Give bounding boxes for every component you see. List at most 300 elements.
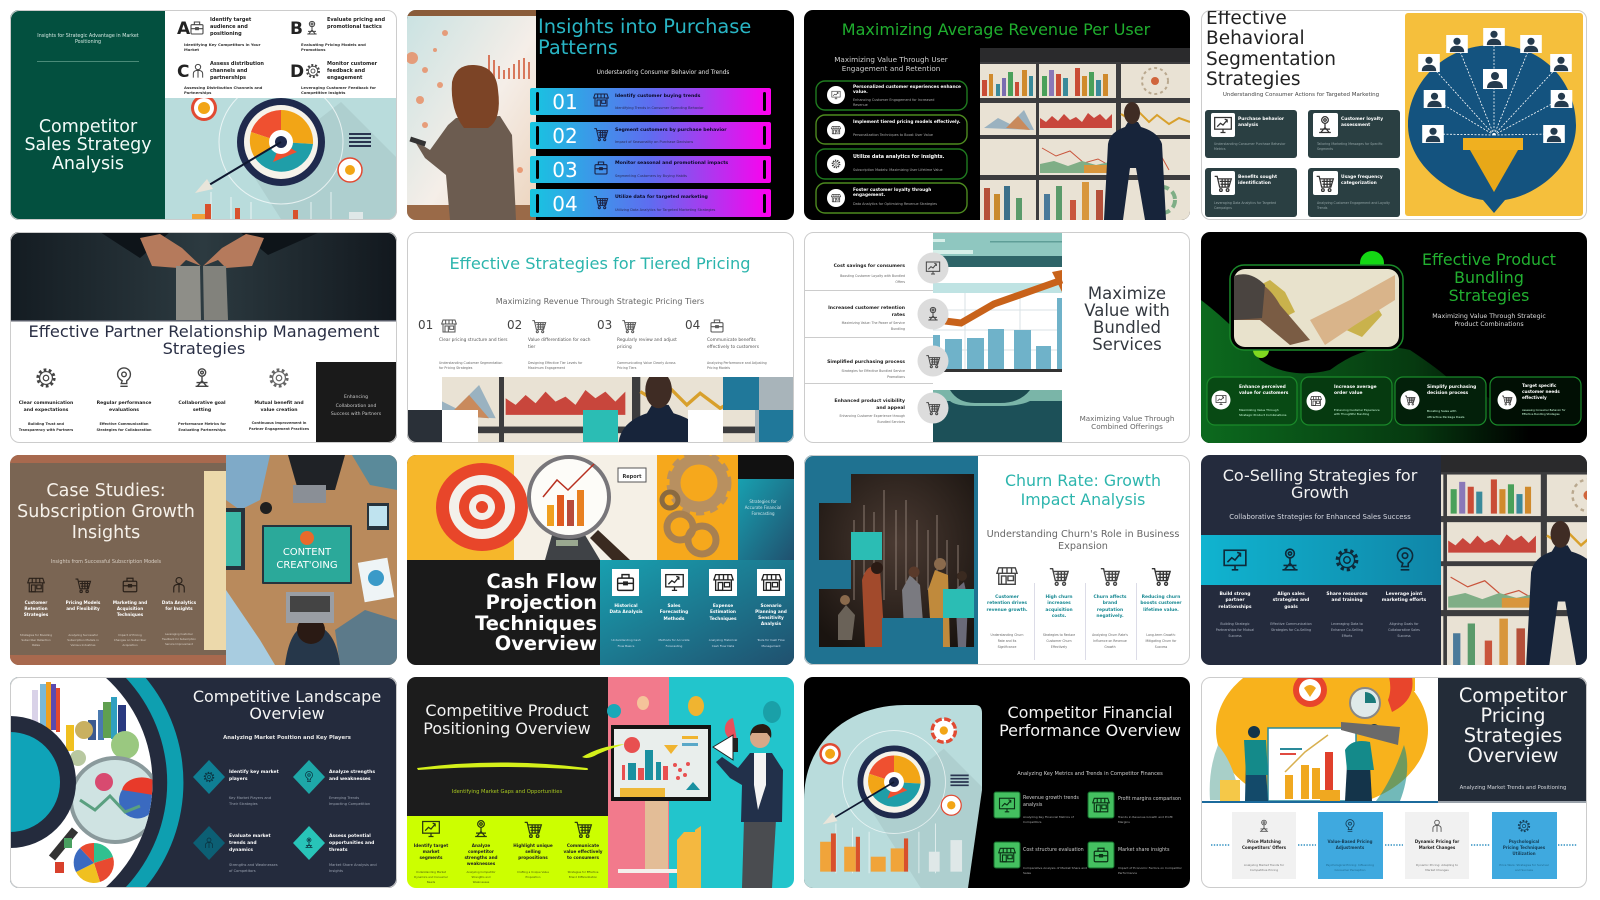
- step 03: Monitor seasonal and promotional impacts: [615, 160, 728, 166]
- item 3: of Competitors: [229, 869, 256, 873]
- card 2: Consumer Perception: [1335, 868, 1366, 872]
- item A: [177, 17, 261, 52]
- callout: [316, 362, 397, 443]
- column 4: Partner Engagement Practices: [249, 427, 309, 431]
- column 1: retention drives: [987, 600, 1027, 606]
- card: usage frequency: Analyzing Customer Engagement and Loyalty: [1317, 201, 1390, 205]
- step 03: pricing: [617, 344, 632, 350]
- title: Pricing: [1480, 704, 1546, 727]
- column 2: Weaknesses: [473, 880, 490, 884]
- panel: slide 10 Cash Flow Projection: [407, 453, 794, 665]
- photo: woman looking at shelves: [406, 10, 536, 220]
- column 1: partner: [1225, 597, 1245, 603]
- card 3: [816, 149, 967, 179]
- row 3: Simplified purchasing process: [827, 359, 905, 365]
- column 4: lifetime value.: [1143, 607, 1179, 613]
- column 1: Success: [1228, 634, 1242, 638]
- column 2: Strategies for Co-Selling: [1271, 628, 1311, 632]
- subtitle: Maximizing Value Through User: [834, 55, 948, 64]
- column 2: strengths and: [464, 855, 498, 860]
- column 3: Churn affects: [1093, 594, 1127, 600]
- item B: promotional tactics: [327, 24, 382, 30]
- item 1: players: [229, 776, 248, 782]
- column 2: Methods: [664, 616, 685, 622]
- column 3: selling: [525, 849, 541, 854]
- item 2: Analyze strengths: [329, 769, 375, 775]
- column 2: High churn: [1045, 594, 1073, 600]
- item 3: Cost structure evaluation: [1023, 847, 1084, 853]
- column 2: acquisition: [1045, 607, 1073, 613]
- column 1: Customer: [995, 594, 1020, 600]
- column 1: Build strong: [1219, 591, 1251, 597]
- step 01: 01: [552, 90, 578, 114]
- column 1: Rate and Its: [998, 639, 1017, 643]
- cyan icon band: [1201, 535, 1441, 585]
- photo: people at dark stage: [819, 474, 974, 647]
- item 2: Profit margins comparison: [1118, 796, 1181, 802]
- row 1: [834, 252, 948, 284]
- item C: channels and: [210, 68, 248, 74]
- card 1: Analyzing Market Trends for: [1244, 863, 1285, 867]
- card 1: Revenue: [853, 103, 868, 107]
- item B: [290, 17, 385, 52]
- step 01: [530, 88, 771, 115]
- column 1: and expectations: [24, 407, 69, 413]
- card: purchase behavior: Purchase behavior: [1238, 116, 1285, 122]
- step 02: 02: [552, 124, 578, 148]
- title: Subscription Growth: [17, 502, 195, 522]
- column 2: [659, 569, 690, 648]
- photo: handshake over map: [1230, 265, 1403, 350]
- column 4: Brand Differentiation: [569, 875, 597, 879]
- subtitle: Expansion: [1058, 541, 1108, 552]
- subtitle: Analyzing Market Position and Key Players: [223, 735, 351, 741]
- column 1: Historical: [614, 603, 638, 609]
- row 2: Increased customer retention: [828, 305, 905, 311]
- column 2: Analyzing Competitor: [466, 870, 496, 874]
- illustration: presenter with megaphone: [607, 696, 783, 888]
- column 4: [564, 822, 603, 879]
- step 02: 02: [507, 318, 522, 332]
- title: Co-Selling Strategies for: [1223, 466, 1418, 485]
- step 04: Pricing Models: [707, 366, 730, 370]
- column 2: Methods for Accurate: [659, 638, 690, 642]
- corner note: Forecasting: [751, 511, 775, 516]
- subtitle: Insights from Successful Subscription Models: [51, 559, 162, 565]
- card: purchase behavior: Understanding Consumer Purchase Behavior: [1214, 142, 1286, 146]
- column 1: [19, 370, 73, 432]
- card 1: Competitors' Offers: [1242, 845, 1287, 850]
- column 3: Analyzing Historical: [709, 638, 737, 642]
- item B: Evaluating Pricing Models and: [301, 42, 366, 47]
- panel: slide 16 Competitor Pricing Strategies: [1201, 652, 1587, 888]
- title: Strategies: [163, 339, 245, 358]
- column 2: Analyze: [472, 843, 490, 848]
- column 3: Analyzing Churn Rate's: [1092, 633, 1128, 637]
- item 1: Key Market Players and: [229, 796, 271, 800]
- column 4: Collaborative Sales: [1388, 628, 1420, 632]
- title: Overview: [249, 704, 325, 723]
- title: Impact Analysis: [1021, 490, 1145, 509]
- column 4: Success: [1397, 634, 1411, 638]
- subtitle: Positioning: [75, 39, 101, 45]
- item B: B: [290, 19, 303, 39]
- item D: feedback and: [327, 68, 365, 74]
- step 03: 03: [597, 318, 612, 332]
- column 3: Expense: [713, 603, 733, 609]
- column 2: competitor: [468, 849, 495, 854]
- column 4: [162, 578, 197, 646]
- card 4: Effective Bundling Strategies: [1522, 412, 1560, 416]
- photo: target, magnifier, gears: Report: [622, 474, 642, 480]
- column 1: Clear communication: [19, 400, 73, 406]
- column 2: increases: [1047, 600, 1071, 606]
- step 04: effectively to customers: [707, 344, 760, 350]
- card 3: [1405, 812, 1469, 879]
- panel: slide 2 Insights into Purchase Patterns: [406, 10, 794, 220]
- card: purchase behavior: analysis: [1238, 122, 1259, 128]
- title: Competitive Landscape: [193, 687, 381, 706]
- title: Effective: [1206, 8, 1287, 29]
- item D: engagement: [327, 75, 363, 81]
- column 3: Impact of Pricing: [118, 633, 142, 637]
- column 2: Pricing Models: [66, 600, 101, 605]
- column 3: brand: [1103, 600, 1117, 606]
- column 4: value effectively: [564, 849, 603, 854]
- column 3: [178, 369, 226, 432]
- column 1: segments: [419, 855, 443, 860]
- item 3: Strengths and Weaknesses: [229, 863, 278, 867]
- card 3: [1395, 377, 1486, 425]
- dotted connectors: [1211, 844, 1577, 846]
- item 4: Insights: [329, 869, 343, 873]
- column 3: Acquisition: [117, 606, 143, 611]
- card 2: Personalization Techniques to Boost User Value: [853, 133, 933, 137]
- item 3: [994, 842, 1087, 875]
- item 3: Comparative Analysis of Market Share and: [1023, 866, 1087, 870]
- card 2: order value: [1334, 390, 1362, 396]
- item 3: dynamics: [229, 847, 253, 853]
- card 1: Strategic Product Combinations: [1239, 413, 1287, 417]
- card 2: Increase average: [1334, 384, 1377, 390]
- card 4: engagement.: [853, 192, 885, 198]
- column 4: Long-term Growth:: [1146, 633, 1176, 637]
- item A: A: [177, 19, 191, 39]
- card 4: Assessing Consumer Behavior for: [1522, 408, 1567, 412]
- column 3: Evaluating Partnerships: [178, 428, 226, 432]
- panel: slide 14 Product Positioning: [407, 677, 794, 888]
- illustration: analysts with chart: [1210, 652, 1428, 808]
- title: Value with: [1084, 301, 1170, 320]
- step 03: Communicating Value Clearly Across: [617, 361, 676, 365]
- title: Services: [1092, 335, 1162, 354]
- card 4: Target specific: [1522, 383, 1557, 388]
- card: benefits sought: Leveraging Data Analytics for Targeted: [1214, 201, 1276, 205]
- panel: slide 9 Case Studies: [10, 455, 397, 665]
- card 3: Attractive Package Deals: [1427, 415, 1465, 419]
- item 3: [193, 826, 278, 873]
- corner note: Accurate Financial: [745, 505, 781, 510]
- card: usage frequency: categorization: [1341, 180, 1377, 186]
- subtitle: Analyzing Market Trends and Positioning: [1460, 785, 1566, 791]
- row 1: Offers: [895, 280, 905, 284]
- column 2: costs.: [1052, 613, 1067, 619]
- step 04: [685, 318, 767, 370]
- subtitle: Combined Offerings: [1091, 422, 1163, 431]
- card 4: Psychological: [1509, 839, 1540, 844]
- column 2: Strategies for Collaboration: [96, 428, 152, 432]
- item 4: threats: [329, 847, 348, 853]
- title: Strategies: [1464, 724, 1562, 747]
- title: Competitor Financial: [1007, 703, 1173, 722]
- column 4: Sensitivity: [758, 615, 784, 621]
- title: Effective Strategies for Tiered Pricing: [449, 254, 751, 273]
- illustration: target scene: [804, 705, 1027, 898]
- column 2: strategies and: [1273, 597, 1309, 603]
- illustration: magnifier and charts: [32, 682, 159, 883]
- card 3: Subscription Models: Maximizing User Lifetime Value: [853, 168, 943, 172]
- item C: Partnerships: [184, 90, 212, 95]
- card: purchase behavior: [1205, 110, 1297, 158]
- step 01: Clear pricing structure and tiers: [439, 337, 508, 343]
- column 1: Understanding Cash: [611, 638, 641, 642]
- title: Case Studies:: [46, 481, 166, 501]
- card 1: Enhancing Customer Engagement for Increased: [853, 98, 934, 102]
- column 4: Service Improvement: [165, 642, 193, 646]
- callout: Collaboration and: [336, 403, 376, 409]
- column 1: Flow Basics: [618, 644, 635, 648]
- column 3: Leveraging Data to: [1331, 622, 1363, 626]
- card 4: Price Wars: Strategies for Survival: [1499, 863, 1549, 867]
- column 1: [609, 569, 643, 648]
- column 4: to consumers: [567, 855, 599, 860]
- item B: Evaluate pricing and: [327, 17, 385, 23]
- card 1: value for customers: [1239, 390, 1289, 396]
- step 02: [530, 122, 771, 149]
- item C: [177, 61, 264, 95]
- card: benefits sought: Campaigns: [1214, 206, 1232, 210]
- step 04: Communicate benefits: [707, 337, 756, 343]
- card 4: Foster customer loyalty through: [853, 187, 931, 193]
- title: Strategies: [1206, 69, 1300, 90]
- card: usage frequency: [1308, 168, 1400, 217]
- column 3: Efforts: [1342, 634, 1353, 638]
- column 2: Strengths and: [472, 875, 491, 879]
- card: usage frequency: Usage frequency: [1341, 174, 1383, 180]
- column 1: Dynamics and Consumer: [414, 875, 449, 879]
- item 2: and weaknesses: [329, 776, 371, 782]
- column 3: Enhance Co-Selling: [1331, 628, 1363, 632]
- card 2: Value-Based Pricing: [1328, 839, 1373, 844]
- title: Overview: [495, 632, 597, 655]
- step 03: Regularly review and adjust: [617, 337, 677, 343]
- card 2: [1318, 812, 1383, 879]
- card 4: customer needs: [1522, 389, 1560, 394]
- step 03: [597, 318, 677, 370]
- column 1: Strategies: [24, 612, 49, 617]
- column 4: Leveraging Customer: [165, 632, 194, 636]
- photo: hands and stones: [10, 232, 397, 320]
- column 2: Align sales: [1277, 591, 1305, 597]
- card 1: Competitive Pricing: [1250, 868, 1278, 872]
- title: Insights: [72, 523, 140, 543]
- photo strip with color blocks: [406, 282, 794, 568]
- title: Competitor: [1459, 684, 1567, 707]
- column 4: Scenario: [760, 603, 782, 609]
- step 01: 01: [418, 318, 433, 332]
- card 4: [1492, 812, 1557, 879]
- subtitle: Collaborative Strategies for Enhanced Sales Success: [1229, 513, 1411, 521]
- item 4: Market share insights: [1118, 847, 1170, 853]
- item 4: Impact of Economic Factors on Competitor: [1118, 866, 1183, 870]
- column 2: [96, 368, 152, 432]
- column 1: market: [423, 849, 439, 854]
- subtitle: Maximizing Revenue Through Strategic Pricing Tiers: [496, 297, 704, 306]
- step 03: Pricing Tiers: [617, 366, 637, 370]
- card 1: Maximizing Value Through: [1239, 408, 1279, 412]
- corner note: Strategies for: [749, 499, 777, 504]
- panel: slide 11 Churn Rate: [804, 455, 1190, 665]
- illustration: growth chart: [933, 232, 1062, 443]
- row 1: Boosting Customer Loyalty with Bundled: [840, 274, 905, 278]
- title: Overview: [1468, 744, 1558, 767]
- panel: slide 7 Bundled Services: [804, 232, 1190, 443]
- card 4: Utilization: [1512, 851, 1536, 856]
- column 2: Customer Churn: [1046, 639, 1072, 643]
- subtitle: Maximizing Value Through Strategic: [1432, 313, 1546, 320]
- card: benefits sought: identification: [1238, 180, 1271, 186]
- column 3: Marketing and: [113, 600, 147, 605]
- item 2: Impacting Competition: [329, 802, 370, 806]
- card 3: Dynamic Pricing: Adapting to: [1416, 863, 1458, 867]
- column 4: boosts customer: [1140, 600, 1182, 606]
- card: benefits sought: Benefits sought: [1238, 174, 1277, 180]
- column 3: Performance Metrics for: [178, 422, 226, 426]
- column 3: Proposition: [526, 875, 541, 879]
- item A: Identifying Key Competitors in Your: [184, 42, 261, 47]
- column 2: weaknesses: [467, 861, 496, 866]
- step 03: 03: [552, 158, 578, 182]
- item 4: [293, 826, 377, 873]
- item 2: Trends in Revenue Growth and Profit: [1117, 815, 1173, 819]
- column 1: [986, 568, 1028, 649]
- row 4: [834, 392, 948, 424]
- column 2: Regular performance: [97, 400, 151, 406]
- card: benefits sought: [1205, 168, 1297, 217]
- step 02: Segment customers by purchase behavior: [615, 127, 727, 133]
- item D: [290, 61, 378, 95]
- item 4: opportunities and: [329, 840, 374, 846]
- title: Effective Product: [1422, 250, 1556, 269]
- column 4: Leverage joint: [1386, 591, 1423, 597]
- title: Segmentation: [1206, 49, 1336, 70]
- column 4: for Insights: [165, 606, 193, 611]
- row 4: and appeal: [876, 405, 905, 411]
- column 3: Techniques: [117, 612, 144, 617]
- title: Analysis: [52, 154, 124, 174]
- title: Positioning Overview: [423, 719, 591, 738]
- column 2: [66, 579, 101, 647]
- column 2: Effective Communication: [99, 422, 149, 426]
- column 4: Mutual benefit and: [254, 400, 304, 406]
- card: customer loyalty: assessment: [1341, 122, 1370, 128]
- panel: slide 4 Effective Behavioral Segmentation Strategies: [1201, 8, 1587, 220]
- step 02: Value differentiation for each: [528, 337, 591, 343]
- column 4: Communicate: [567, 843, 599, 848]
- row 4: Enhancing Customer Experience through: [839, 414, 905, 418]
- card 4: [816, 183, 967, 213]
- column 2: Forecasting: [660, 609, 688, 615]
- subtitle: Insights for Strategic Advantage in Market: [37, 33, 139, 39]
- illustration: audience funnel: [1405, 13, 1583, 216]
- column 4: [1382, 591, 1427, 638]
- card 4: [1490, 377, 1581, 425]
- column 3: Collaborative goal: [178, 400, 226, 406]
- panel: slide 6 Tiered Pricing: [407, 232, 794, 443]
- item 4: Performance: [1118, 871, 1137, 875]
- subtitle: Understanding Churn's Role in Business: [987, 529, 1179, 540]
- photo: team around table: CONTENT: [283, 547, 332, 558]
- column 4: [1140, 569, 1182, 649]
- item 2: [293, 760, 375, 806]
- column 1: Partnerships for Mutual: [1216, 628, 1254, 632]
- card 3: Market Changes: [1425, 868, 1449, 872]
- column 2: Subscription Models in: [67, 638, 99, 642]
- title: Performance Overview: [999, 721, 1181, 740]
- column 4: [249, 370, 309, 431]
- column 3: negatively.: [1096, 613, 1124, 619]
- card 2: Enhancing Customer Experience: [1334, 408, 1380, 412]
- subtitle: Maximizing Value Through: [1080, 414, 1174, 423]
- column 4: Management: [761, 644, 781, 648]
- item 1: Competitors: [1023, 820, 1042, 824]
- column 4: Reducing churn: [1142, 594, 1180, 600]
- subtitle: Engagement and Retention: [842, 64, 940, 73]
- card 1: Personalized customer experiences enhance: [853, 84, 961, 90]
- column 1: Needs: [427, 880, 436, 884]
- title: Sales Strategy: [24, 135, 152, 155]
- column 1: Transparency with Partners: [19, 428, 73, 432]
- title: Techniques: [475, 612, 597, 635]
- subtitle: Product Combinations: [1454, 321, 1524, 328]
- panel: slide 3 Maximizing Average Revenue Per User: [804, 10, 1190, 220]
- card 1: [1232, 812, 1296, 879]
- column 3: Estimation: [710, 609, 736, 615]
- item 2: Margins: [1118, 820, 1130, 824]
- card: customer loyalty: Customer loyalty: [1341, 116, 1383, 122]
- item D: Monitor customer: [327, 61, 378, 67]
- item C: Assessing Distribution Channels and: [184, 85, 263, 90]
- subtitle: Analyzing Key Metrics and Trends in Competitor Finances: [1017, 771, 1163, 777]
- title: Insights into Purchase: [538, 15, 751, 38]
- row 3: Promotions: [887, 375, 905, 379]
- card 2: [1301, 377, 1392, 425]
- photo: team around table: CREAT'OING: [276, 560, 338, 571]
- step 02: [507, 318, 591, 370]
- item 1: Their Strategies: [228, 802, 258, 806]
- item 3: Sales: [1023, 871, 1031, 875]
- photo: man viewing dashboards: [1375, 455, 1600, 665]
- column 1: Customer: [25, 600, 48, 605]
- column 1: Significance: [998, 645, 1016, 649]
- column 1: Building Trust and: [28, 422, 65, 426]
- column 1: Understanding Market: [416, 870, 446, 874]
- step 04: [530, 189, 771, 217]
- column 2: Effectively: [1051, 645, 1067, 649]
- row 2: Maximizing Value: The Power of Service: [842, 321, 905, 325]
- column 2: Forecasting: [666, 644, 683, 648]
- title: Churn Rate: Growth: [1005, 471, 1161, 490]
